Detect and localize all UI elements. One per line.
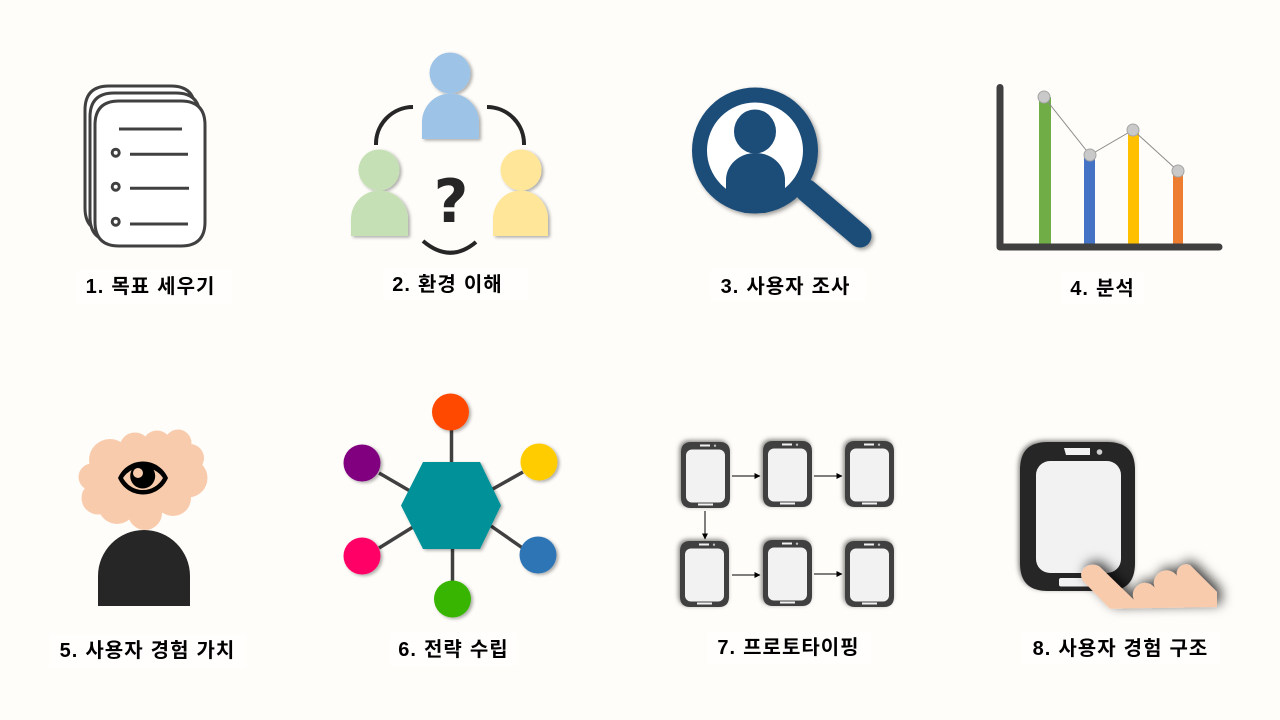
label: step 8: 8. 사용자 경험 구조: [1033, 637, 1208, 660]
label: step 8: [1022, 632, 1220, 665]
label: step 6: [390, 633, 518, 666]
label: step 3: 3. 사용자 조사: [721, 275, 850, 298]
chart: bars with line and axes: [1000, 88, 1219, 247]
label: step 5: [50, 634, 246, 667]
label: step 1: 1. 목표 세우기: [86, 275, 215, 298]
label: step 7: 7. 프로토타이핑: [717, 636, 860, 659]
icon: three people around a question mark: [351, 52, 548, 253]
label: step 4: 4. 분석: [1070, 277, 1135, 300]
label: step 1: [76, 270, 232, 303]
icon: stacked document pages: [85, 86, 205, 246]
label: step 2: [383, 267, 528, 300]
label: step 7: [707, 631, 871, 664]
icon: person with thought cloud and eye: [78, 430, 208, 606]
icon: large phone with tapping hand: [1020, 442, 1217, 609]
label: step 6: 6. 전략 수립: [398, 638, 509, 661]
icon: three people around a question mark: ?: [434, 167, 468, 237]
label: step 4: [1062, 271, 1144, 304]
label: step 2: 2. 환경 이해: [392, 273, 503, 296]
label: step 3: [710, 269, 866, 302]
icon: magnifier with person: [700, 95, 860, 236]
diagram: prototype phone flow: [680, 441, 894, 607]
label: step 5: 5. 사용자 경험 가치: [60, 639, 235, 662]
diagram: hexagon hub with six nodes: [344, 394, 558, 618]
